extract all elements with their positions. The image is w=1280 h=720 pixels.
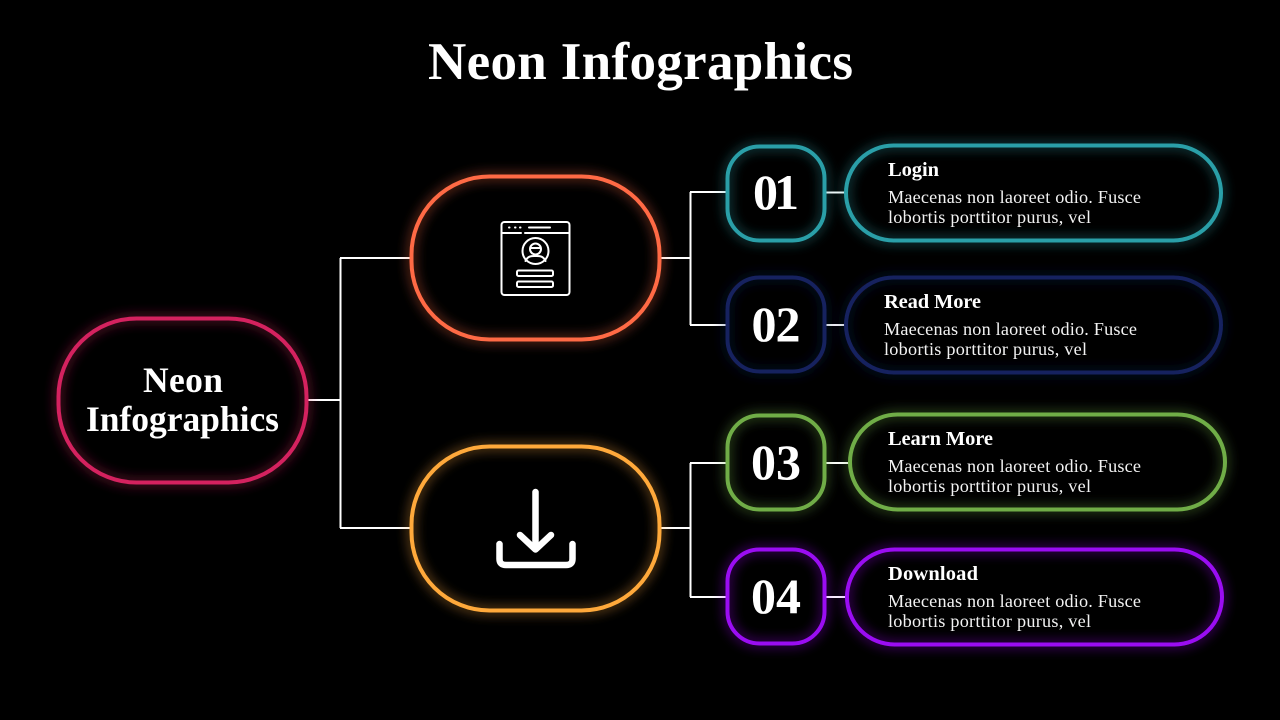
icon: download arrow [500,492,572,565]
panel: step 03 learn more: Learn More [888,428,993,450]
connector lines [306,192,849,597]
panel: step 01 number [728,146,824,240]
panel: step 01 login: lobortis porttitor purus, vel [888,207,1091,227]
panel: step 04 download: lobortis porttitor purus, vel [888,611,1091,631]
panel: step 02 read more [846,278,1221,372]
icon: login window [502,222,570,295]
root label [86,360,279,439]
panel: step 03 number: 03 [751,434,801,490]
panel: step 02 read more: Maecenas non laoreet odio. Fusce [884,319,1137,339]
panel: step 02 read more: lobortis porttitor purus, vel [884,339,1087,359]
panel: step 02 number: 02 [752,296,800,352]
panel: step 02 read more: Read More [884,291,981,313]
panel: step 03 learn more [850,414,1225,510]
panel: login group node [412,176,660,340]
root label: Neon [143,360,223,400]
panel: step 04 number [728,550,824,644]
title: Neon Infographics [428,33,853,91]
panel: step 04 download: Download [888,563,979,585]
panel: step 04 download [847,550,1222,644]
panel: download group node [412,446,660,610]
panel: step 04 number: 04 [751,568,801,624]
panel: step 03 learn more: lobortis porttitor purus, vel [888,476,1091,496]
panel: step 02 number [728,278,824,372]
panel: step 01 login [846,146,1221,240]
panel: step 03 number [728,416,824,510]
panel: root node [58,318,306,482]
panel: step 04 download: Maecenas non laoreet odio. Fusce [888,591,1141,611]
panel: step 01 number: 01 [753,164,799,220]
panel: step 03 learn more: Maecenas non laoreet odio. Fusce [888,456,1141,476]
panel: step 01 login: Login [888,159,940,181]
root label: Infographics [86,399,279,439]
panel: step 01 login: Maecenas non laoreet odio. Fusce [888,187,1141,207]
